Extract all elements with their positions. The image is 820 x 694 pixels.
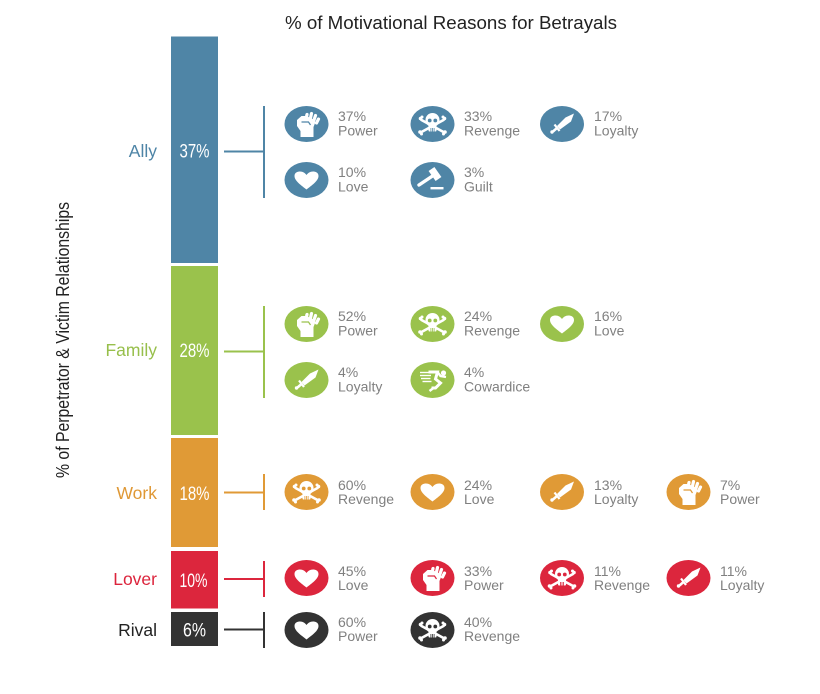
item: Ally loyalty — [540, 106, 638, 142]
item: Ally loyalty: Loyalty — [594, 122, 638, 138]
item: Ally guilt: 3% — [464, 164, 484, 180]
item: Family love: 16% — [594, 308, 622, 324]
item: Ally revenge — [410, 106, 520, 142]
item: Lover revenge: Revenge — [594, 577, 650, 593]
label: Lover: Lover — [113, 569, 157, 589]
item: Ally love: Love — [338, 178, 369, 194]
item: Family loyalty — [284, 362, 382, 398]
item: Lover love — [284, 560, 369, 596]
item: Ally revenge: 33% — [464, 108, 492, 124]
bracket: Lover — [224, 561, 264, 597]
item: Lover loyalty: 11% — [720, 563, 747, 579]
item: Family cowardice: Cowardice — [464, 378, 530, 394]
item: Family power: 52% — [338, 308, 366, 324]
item: Work power: 7% — [720, 477, 740, 493]
item: Family loyalty: 4% — [338, 364, 358, 380]
item: Rival power — [284, 612, 378, 648]
bracket: Ally — [224, 106, 264, 198]
item: Work loyalty: 13% — [594, 477, 622, 493]
group: Work — [116, 438, 760, 547]
bracket: Work — [224, 474, 264, 510]
item: Family love — [540, 306, 625, 342]
item: Lover loyalty: Loyalty — [720, 577, 764, 593]
item: Ally love — [284, 162, 369, 198]
item: Ally power: 37% — [338, 108, 366, 124]
bar: Ally 37%: 37% — [180, 142, 210, 162]
group: Lover — [113, 551, 764, 608]
bar: Rival 6%: 6% — [183, 620, 206, 642]
bar: Work 18% — [171, 438, 218, 547]
item: Rival revenge: Revenge — [464, 628, 520, 644]
item: Family loyalty: Loyalty — [338, 378, 382, 394]
item: Lover power: 33% — [464, 563, 492, 579]
label: Ally: Ally — [129, 141, 157, 161]
item: Family revenge — [410, 306, 520, 342]
title: % of Motivational Reasons for Betrayals — [285, 13, 617, 33]
item: Family revenge: Revenge — [464, 322, 520, 338]
bracket: Family — [224, 306, 264, 398]
label: Rival: Rival — [118, 620, 157, 640]
item: Family cowardice — [410, 362, 530, 398]
item: Ally power — [284, 106, 378, 142]
item: Lover power: Power — [464, 577, 504, 593]
item: Work love: Love — [464, 491, 495, 507]
item: Family power — [284, 306, 378, 342]
y-axis label: % of Perpetrator & Victim Relationships — [53, 202, 73, 478]
label: Work: Work — [116, 483, 157, 503]
item: Lover revenge: 11% — [594, 563, 621, 579]
bar: Ally 37% — [171, 36, 218, 263]
label: Family: Family — [105, 340, 157, 360]
item: Work power: Power — [720, 491, 760, 507]
item: Family love: Love — [594, 322, 625, 338]
group: Ally — [129, 36, 638, 263]
item: Work love: 24% — [464, 477, 492, 493]
item: Rival revenge: 40% — [464, 614, 492, 630]
item: Family cowardice: 4% — [464, 364, 484, 380]
item: Lover love: Love — [338, 577, 369, 593]
item: Ally revenge: Revenge — [464, 122, 520, 138]
bar: Work 18%: 18% — [180, 484, 210, 505]
item: Work power — [666, 474, 760, 510]
bar: Family 28%: 28% — [180, 341, 210, 362]
item: Ally loyalty: 17% — [594, 108, 622, 124]
item: Work revenge — [284, 474, 394, 510]
item: Work loyalty — [540, 474, 638, 510]
item: Work loyalty: Loyalty — [594, 491, 638, 507]
bracket: Rival — [224, 612, 264, 648]
item: Rival power: Power — [338, 628, 378, 644]
item: Ally guilt — [410, 162, 493, 198]
item: Lover love: 45% — [338, 563, 366, 579]
item: Family power: Power — [338, 322, 378, 338]
group: Family — [105, 266, 625, 435]
item: Ally guilt: Guilt — [464, 178, 493, 194]
bar: Lover 10% — [171, 551, 218, 608]
group: Rival — [118, 612, 520, 648]
item: Family revenge: 24% — [464, 308, 492, 324]
item: Rival power: 60% — [338, 614, 366, 630]
bar: Rival 6% — [171, 612, 218, 646]
item: Work love — [410, 474, 495, 510]
item: Lover revenge — [540, 560, 650, 596]
bar: Lover 10%: 10% — [180, 571, 208, 592]
item: Lover loyalty — [666, 560, 764, 596]
item: Lover power — [410, 560, 504, 596]
item: Rival revenge — [410, 612, 520, 648]
item: Work revenge: Revenge — [338, 491, 394, 507]
item: Ally power: Power — [338, 122, 378, 138]
item: Ally love: 10% — [338, 164, 366, 180]
bar: Family 28% — [171, 266, 218, 435]
item: Work revenge: 60% — [338, 477, 366, 493]
